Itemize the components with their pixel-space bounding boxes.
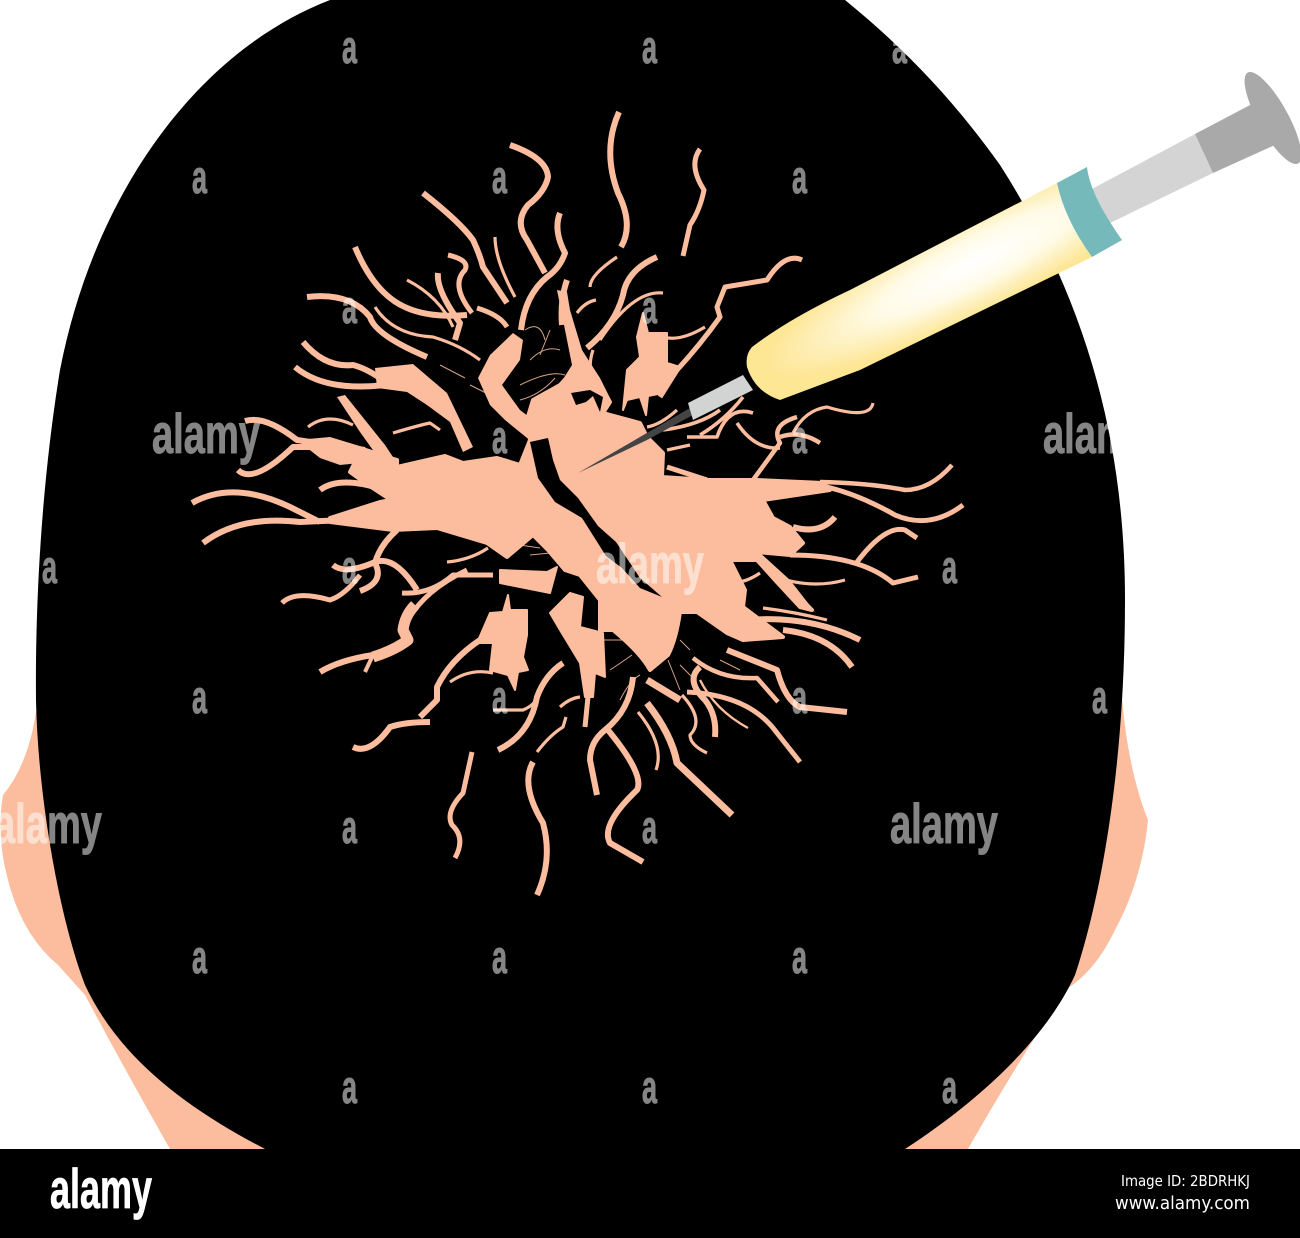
- syringe needle: [578, 408, 693, 473]
- stock watermarks: a: [892, 21, 907, 73]
- small upper island: [623, 313, 680, 415]
- stock watermarks: alamy: [596, 532, 704, 595]
- stock watermarks: a: [792, 931, 807, 983]
- lower-right scalp arm: [757, 550, 815, 612]
- central exposed scalp: [330, 372, 830, 670]
- stock watermarks: a: [1092, 281, 1107, 333]
- stock watermarks: a: [342, 281, 357, 333]
- syringe collar: [1057, 167, 1122, 257]
- stock watermarks: a: [342, 541, 357, 593]
- stock watermarks: a: [942, 1061, 957, 1113]
- neck and ears skin: [0, 698, 1148, 1149]
- website: www.alamy.com: [1115, 1193, 1250, 1214]
- stock watermarks: a: [492, 671, 507, 723]
- syringe plunger grip: [1195, 104, 1275, 173]
- pocket in the scalp: [571, 390, 603, 412]
- stock watermarks: a: [792, 671, 807, 723]
- syringe barrel: [747, 183, 1092, 400]
- left strand root: [297, 437, 397, 467]
- stock watermarks: a: [192, 671, 207, 723]
- syringe plunger shaft: [1090, 134, 1213, 223]
- stock watermarks: a: [942, 541, 957, 593]
- syringe: [578, 65, 1300, 473]
- stock watermarks: a: [342, 21, 357, 73]
- stock watermarks: a: [192, 931, 207, 983]
- thick hair strands: [192, 112, 963, 895]
- stock watermarks: a: [342, 1061, 357, 1113]
- lower islands: [477, 567, 605, 697]
- fine hairlines in the dark gaps: [440, 327, 740, 700]
- footer bar: [0, 1149, 1300, 1238]
- stock watermarks: alamy: [152, 402, 260, 465]
- stock watermarks: alamy: [1043, 402, 1151, 465]
- stock watermarks: a: [492, 411, 507, 463]
- upper-left scalp arms: [337, 333, 540, 463]
- upper scalp arm: [550, 290, 612, 410]
- stock watermarks: [0, 21, 1151, 1113]
- stock watermarks: a: [792, 151, 807, 203]
- stock watermarks: a: [642, 21, 657, 73]
- bald patch: [192, 112, 963, 895]
- syringe hub: [688, 375, 753, 420]
- stock watermarks: a: [642, 801, 657, 853]
- thin hair strands: [308, 237, 873, 770]
- crack through the patch: [530, 438, 662, 597]
- stock watermarks: alamy: [890, 792, 998, 855]
- stock watermarks: a: [1092, 671, 1107, 723]
- stock watermarks: a: [192, 151, 207, 203]
- stock watermarks: a: [342, 801, 357, 853]
- stock watermarks: a: [642, 281, 657, 333]
- stock watermarks: a: [492, 931, 507, 983]
- syringe thumb flange: [1235, 65, 1300, 171]
- head hair silhouette: [36, 0, 1125, 1149]
- stock watermarks: a: [792, 411, 807, 463]
- stock watermarks: a: [642, 1061, 657, 1113]
- stock watermarks: a: [492, 151, 507, 203]
- footer logo: alamy: [50, 1157, 152, 1220]
- stock watermarks: a: [42, 541, 57, 593]
- image id: Image ID: 2BDRHKJ: [1121, 1172, 1250, 1190]
